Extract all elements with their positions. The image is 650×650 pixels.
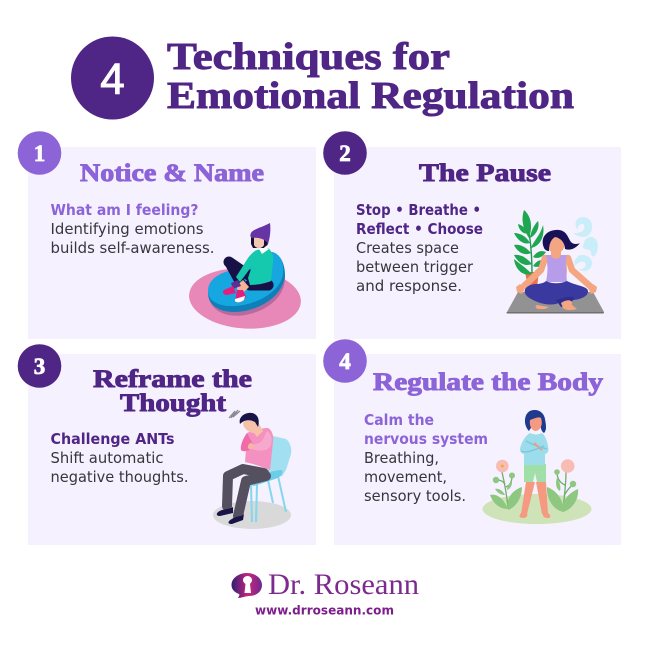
- text block: [50, 430, 188, 486]
- text block: negative thoughts.: [50, 468, 188, 486]
- panel heading: The Pause: [419, 160, 551, 187]
- text block: [50, 201, 214, 257]
- panel: Regulate the Body: [323, 339, 621, 545]
- website: www.drroseann.com: [255, 602, 394, 618]
- footer logo: [232, 568, 419, 618]
- illustration: seated man with stress squiggle: [213, 410, 291, 529]
- text block: Shift automatic: [50, 449, 164, 467]
- text block: What am I feeling?: [50, 201, 198, 219]
- text block: Reflect • Choose: [356, 220, 483, 238]
- illustration: meditating woman: [506, 210, 604, 314]
- badge 3: [18, 344, 61, 388]
- text block: Stop • Breathe •: [356, 201, 481, 219]
- text block: Creates space: [356, 239, 459, 257]
- panel heading: Reframe the: [93, 366, 252, 393]
- brand name: Dr. Roseann: [268, 568, 419, 601]
- text block: sensory tools.: [364, 487, 466, 505]
- text block: between trigger: [356, 258, 474, 276]
- text block: Identifying emotions: [50, 220, 204, 238]
- icon: number 4 badge: 4: [100, 55, 125, 104]
- panel: Notice and Name: [18, 131, 316, 339]
- panel heading: Thought: [120, 390, 227, 417]
- panel: The Pause: [323, 131, 621, 339]
- badge 1: [18, 131, 61, 175]
- illustration: girl among flowers: [482, 410, 592, 524]
- badge 4: [323, 339, 367, 383]
- text block: Calm the: [364, 411, 434, 429]
- badge 2: 2: [339, 141, 351, 166]
- text block: movement,: [364, 468, 447, 486]
- panel heading: Regulate the Body: [373, 369, 604, 396]
- badge 2: [323, 131, 367, 175]
- text block: nervous system: [364, 430, 488, 448]
- heading: [167, 36, 574, 117]
- illustration: person on beanbag: [187, 223, 303, 332]
- heading: Emotional Regulation: [167, 75, 574, 117]
- text block: and response.: [356, 277, 462, 295]
- text block: Breathing,: [364, 449, 439, 467]
- text block: [364, 411, 488, 505]
- badge 3: 3: [34, 354, 45, 379]
- panel heading: [93, 366, 252, 417]
- panel heading: Notice & Name: [80, 160, 264, 187]
- text block: builds self-awareness.: [50, 239, 214, 257]
- title block: [71, 36, 574, 120]
- badge 1: 1: [34, 141, 45, 166]
- badge 4: 4: [339, 349, 351, 374]
- icon: keyhole speech bubble: [232, 573, 262, 598]
- text block: Challenge ANTs: [50, 430, 174, 448]
- heading: Techniques for: [167, 36, 450, 78]
- panel: Reframe the Thought: [18, 344, 316, 545]
- text block: [356, 201, 483, 295]
- icon: number 4 badge: [71, 36, 154, 120]
